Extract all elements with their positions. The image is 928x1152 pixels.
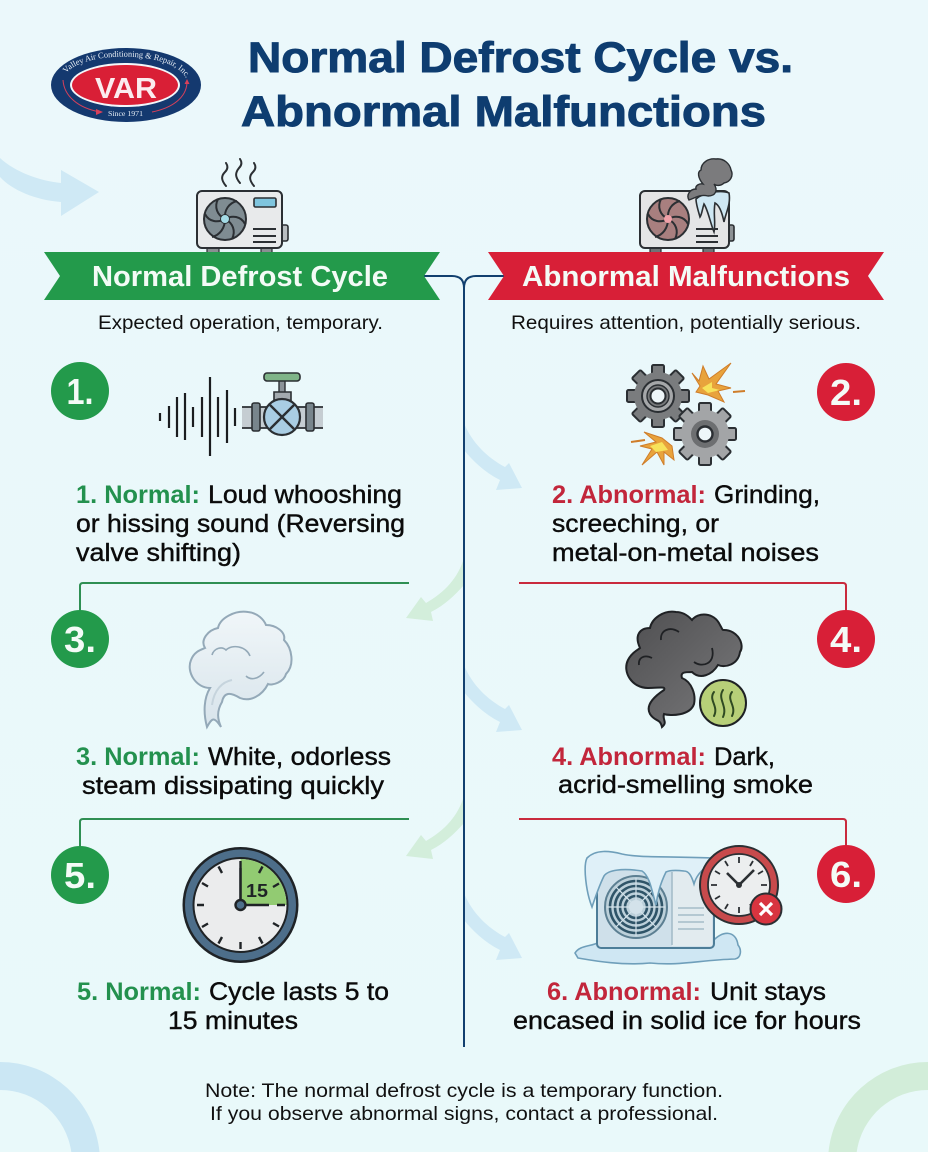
icon: white steam cloud xyxy=(190,612,292,727)
flow arrow: blue to item 4 xyxy=(464,665,522,732)
banner: Abnormal Malfunctions xyxy=(488,252,884,300)
text: item 2: Grinding, xyxy=(714,481,820,509)
text: item 3: White, odorless xyxy=(208,743,391,771)
subtitle: abnormal: Requires attention, potentially serious. xyxy=(511,312,861,334)
badge 1: 1. xyxy=(66,371,94,412)
icon: abnormal AC unit with smoke and ice xyxy=(640,159,734,253)
decorative arc: bottom left xyxy=(0,1062,100,1152)
logo: Valley Air Conditioning & Repair, Inc. xyxy=(62,51,188,78)
badge 2 xyxy=(817,363,875,421)
footer note xyxy=(205,1080,723,1125)
central divider line xyxy=(424,276,504,1047)
banner: Normal Defrost Cycle: Normal Defrost Cycle xyxy=(92,261,388,293)
badge 5 xyxy=(51,846,109,904)
logo: Since 1971 xyxy=(108,109,143,118)
text: item 4 xyxy=(552,743,813,799)
title xyxy=(241,34,793,136)
icon: clock showing 15 minutes xyxy=(182,847,298,963)
connector: 4 to 6 xyxy=(519,819,846,848)
logo: VAR xyxy=(95,73,157,105)
text: item 6: Unit stays xyxy=(710,978,826,1006)
icon: sound wave and reversing valve xyxy=(160,373,323,456)
connector: 2 to 4 xyxy=(519,583,846,612)
icon: normal outdoor AC unit with heat waves xyxy=(197,159,288,253)
text: item 2: 2. Abnormal: xyxy=(552,481,706,509)
footer note: If you observe abnormal signs, contact a professional. xyxy=(210,1103,718,1125)
connector: 1 to 3 xyxy=(80,583,409,612)
text: item 6: encased in solid ice for hours xyxy=(513,1007,861,1035)
text: item 3 xyxy=(76,743,391,800)
text: item 5: Cycle lasts 5 to xyxy=(209,978,389,1006)
flow arrow: green to item 3 xyxy=(406,558,464,621)
decorative arc: bottom right xyxy=(828,1062,928,1152)
title: Abnormal Malfunctions xyxy=(241,88,766,136)
badge 4: 4. xyxy=(830,619,862,660)
text: item 1: Loud whooshing xyxy=(208,481,402,509)
icon: grinding gears with sparks xyxy=(627,363,745,465)
text: item 4: Dark, xyxy=(714,743,775,771)
icon: frozen unit with clock xyxy=(575,846,782,964)
connector: 3 to 5 xyxy=(80,819,409,848)
icon: clock showing 15 minutes: 15 xyxy=(246,881,268,901)
banner: Abnormal Malfunctions: Abnormal Malfunctions xyxy=(522,261,850,293)
text: item 4: acrid-smelling smoke xyxy=(558,771,813,799)
subtitle: normal: Expected operation, temporary. xyxy=(98,312,383,334)
text: item 3: 3. Normal: xyxy=(76,743,200,771)
text: item 2: metal-on-metal noises xyxy=(552,539,819,567)
text: item 1: valve shifting) xyxy=(76,539,241,567)
flow arrow: green to item 5 xyxy=(406,796,464,859)
text: item 5: 15 minutes xyxy=(168,1007,298,1035)
text: item 6: 6. Abnormal: xyxy=(547,978,701,1006)
logo xyxy=(51,48,201,122)
badge 5: 5. xyxy=(64,855,96,896)
icon: dark smoke with odor badge xyxy=(626,612,746,727)
flow arrow: blue to item 2 xyxy=(464,423,522,490)
decorative arrow: top left xyxy=(0,158,99,216)
banner: Normal Defrost Cycle xyxy=(44,252,440,300)
badge 6: 6. xyxy=(830,854,862,895)
badge 6 xyxy=(817,845,875,903)
text: item 1 xyxy=(76,481,405,567)
badge 3 xyxy=(51,610,109,668)
badge 4 xyxy=(817,610,875,668)
badge 3: 3. xyxy=(64,619,96,660)
text: item 3: steam dissipating quickly xyxy=(82,772,385,800)
text: item 2 xyxy=(552,481,820,567)
footer note: Note: The normal defrost cycle is a temporary function. xyxy=(205,1080,723,1102)
text: item 4: 4. Abnormal: xyxy=(552,743,706,771)
text: item 2: screeching, or xyxy=(552,510,719,538)
text: item 5: 5. Normal: xyxy=(77,978,201,1006)
flow arrow: blue to item 6 xyxy=(464,893,522,960)
text: item 1: 1. Normal: xyxy=(76,481,200,509)
text: item 5 xyxy=(77,978,389,1035)
badge 1 xyxy=(51,362,109,420)
text: item 6 xyxy=(513,978,861,1035)
title: Normal Defrost Cycle vs. xyxy=(248,34,793,82)
text: item 1: or hissing sound (Reversing xyxy=(76,510,405,538)
badge 2: 2. xyxy=(830,372,862,413)
